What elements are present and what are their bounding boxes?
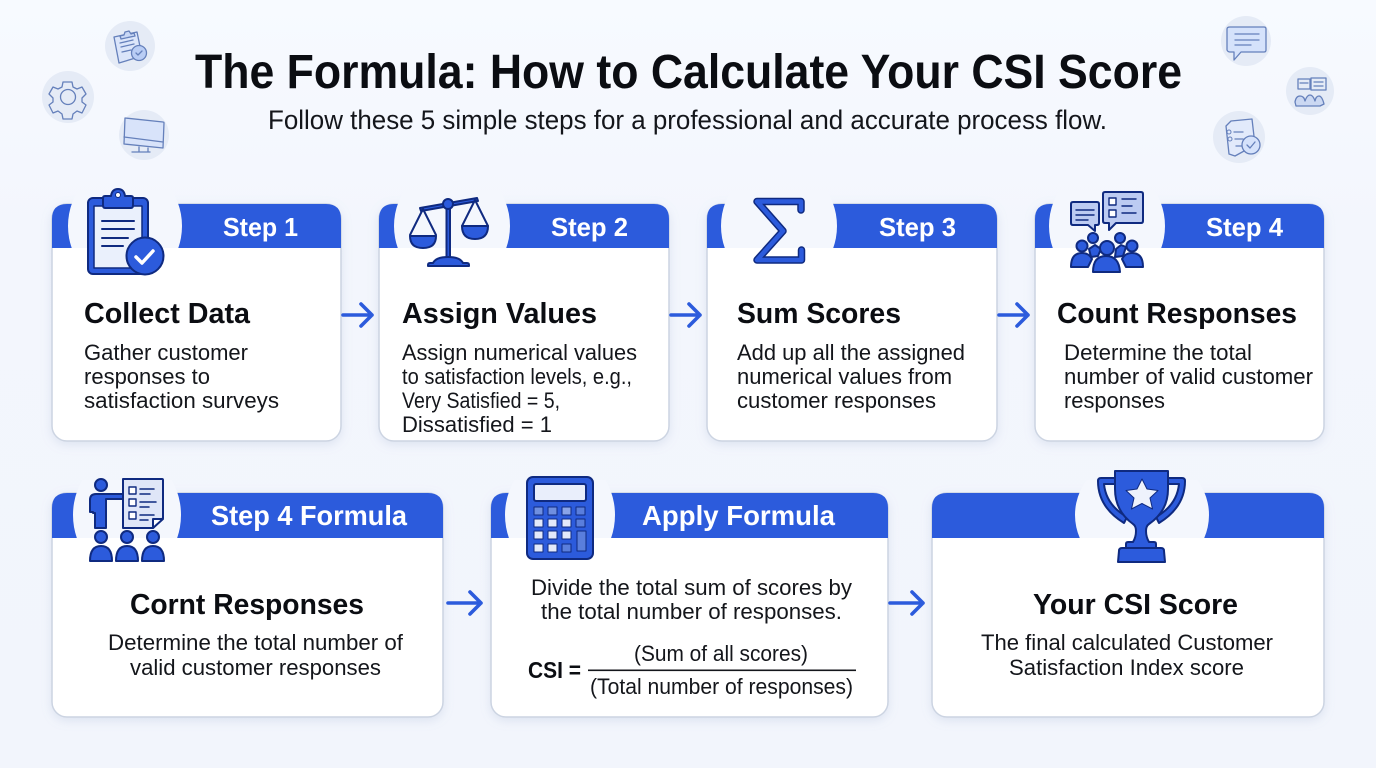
description: Assign numerical values	[402, 340, 637, 365]
description: the total number of responses.	[541, 599, 842, 624]
description: Gather customer	[84, 340, 248, 365]
arrow 2	[671, 304, 700, 326]
subtitle: Follow these 5 simple steps for a professional and accurate process flow.	[268, 105, 1107, 135]
formula: (Sum of all scores)	[634, 641, 808, 666]
description: valid customer responses	[130, 655, 381, 680]
description	[981, 630, 1273, 680]
icon: background clipboard	[105, 21, 155, 71]
description	[531, 575, 853, 624]
description: number of valid customer	[1064, 364, 1313, 389]
apply formula label: Apply Formula	[642, 500, 835, 531]
description: The final calculated Customer	[981, 630, 1273, 655]
heading: Collect Data	[84, 298, 251, 330]
description: Add up all the assigned	[737, 340, 965, 365]
description: Determine the total number of	[108, 630, 404, 655]
step 1 label: Step 1	[223, 212, 298, 242]
step 4 label: Step 4	[1206, 212, 1284, 242]
icon: background chat bubble	[1221, 16, 1271, 66]
step 2 label: Step 2	[551, 212, 628, 242]
step 4 formula label: Step 4 Formula	[211, 500, 407, 531]
arrow 3	[999, 304, 1028, 326]
description	[84, 340, 279, 413]
formula: CSI =	[528, 657, 581, 683]
arrow 4	[448, 592, 481, 614]
description: satisfaction surveys	[84, 388, 279, 413]
panel: step 3	[707, 164, 997, 441]
panel: apply formula	[491, 453, 888, 717]
icon: background gear	[42, 71, 94, 123]
icon: background checklist	[1213, 111, 1265, 163]
heading: Sum Scores	[737, 298, 901, 330]
step 3 label: Step 3	[879, 212, 956, 242]
icon: background monitor	[119, 110, 169, 160]
heading: Assign Values	[402, 298, 597, 330]
formula: (Total number of responses)	[590, 674, 853, 699]
description: customer responses	[737, 388, 936, 413]
heading: Count Responses	[1057, 298, 1297, 330]
arrow 1	[343, 304, 372, 326]
description	[108, 630, 404, 680]
icon: presenter with audience	[90, 479, 164, 561]
description: responses to	[84, 364, 210, 389]
icon: people with speech bubbles	[1071, 192, 1143, 272]
panel: step 1	[52, 164, 341, 441]
description: to satisfaction levels, e.g.,	[402, 364, 632, 389]
heading: Cornt Responses	[130, 589, 364, 621]
icon: background group	[1286, 67, 1334, 115]
description: Determine the total	[1064, 340, 1252, 365]
panel: your CSI score	[932, 453, 1324, 717]
arrow 5	[890, 592, 923, 614]
description	[737, 340, 965, 413]
description: Satisfaction Index score	[1009, 655, 1244, 680]
heading: Your CSI Score	[1033, 589, 1238, 621]
description: responses	[1064, 388, 1165, 413]
icon: trophy	[1098, 471, 1185, 562]
icon: calculator	[527, 477, 593, 559]
icon: clipboard with check	[88, 189, 164, 274]
icon: balance scales	[410, 198, 488, 266]
title: The Formula: How to Calculate Your CSI Score	[195, 46, 1182, 99]
panel: step 4 formula	[52, 453, 443, 717]
formula	[528, 641, 856, 699]
description: numerical values from	[737, 364, 952, 389]
description	[402, 340, 637, 437]
description: Very Satisfied = 5,	[402, 388, 560, 413]
description: Dissatisfied = 1	[402, 412, 552, 437]
panel: step 2	[379, 164, 669, 441]
description: Divide the total sum of scores by	[531, 575, 853, 600]
description	[1064, 340, 1313, 413]
icon: sigma	[757, 202, 802, 260]
panel: step 4	[1035, 164, 1324, 441]
